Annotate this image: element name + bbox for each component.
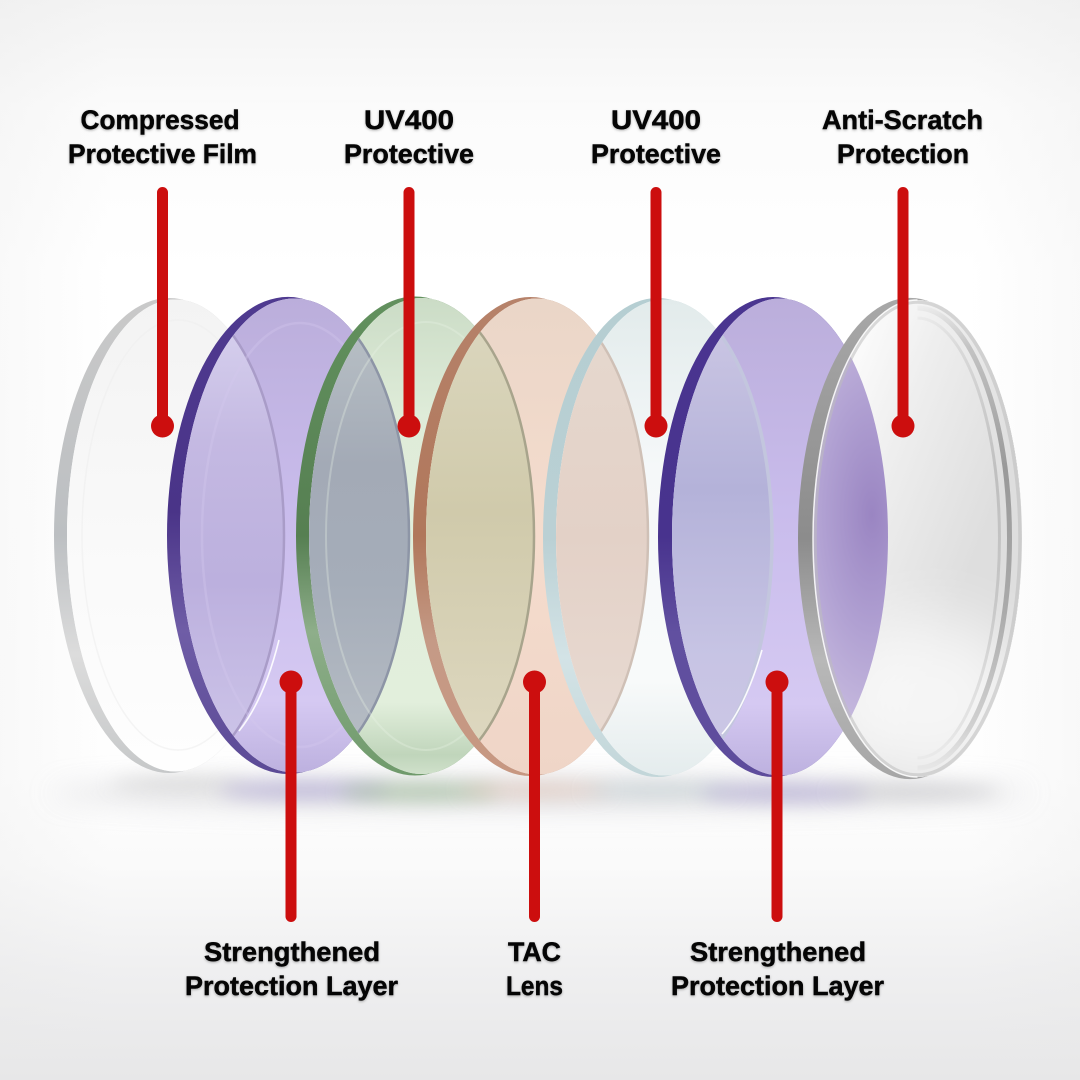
label: Anti-Scratch Protection: Protection (837, 139, 969, 169)
lens 1: clear compressed protective film (54, 298, 284, 773)
callout: UV400 Protective (right) (591, 105, 721, 438)
label: TAC Lens: TAC (508, 937, 561, 967)
lens 7: clear anti-scratch protection (798, 298, 1022, 780)
label: Strengthened Protection Layer: Protection Layer (671, 971, 884, 1001)
lens 4: peach TAC lens (413, 297, 596, 776)
leader line (892, 187, 914, 438)
label: TAC Lens (506, 937, 563, 1001)
label: Strengthened Protection Layer (185, 937, 398, 1001)
label: Compressed Protective Film (68, 105, 257, 169)
label: UV400 Protective: UV400 (364, 105, 454, 135)
leader line (151, 187, 174, 438)
lens 3: green UV400 protective layer (296, 296, 474, 776)
label: Compressed Protective Film: Protective Film (68, 139, 257, 169)
floor shadow (50, 777, 1030, 807)
label: Anti-Scratch Protection (822, 105, 983, 169)
callout: TAC Lens (506, 670, 563, 1001)
callout: Strengthened Protection Layer (right) (671, 670, 884, 1001)
label: UV400 Protective: Protective (344, 139, 474, 169)
label: Strengthened Protection Layer (671, 937, 884, 1001)
callout: Strengthened Protection Layer (left) (185, 670, 398, 1001)
label: UV400 Protective (344, 105, 474, 169)
leader line (398, 187, 420, 438)
lens 6: purple strengthened protection layer (658, 297, 844, 777)
label: UV400 Protective (591, 105, 721, 169)
lens 5: clear UV400 protective layer (543, 298, 716, 777)
callout: UV400 Protective (left) (344, 105, 474, 438)
lens 2: purple strengthened protection layer (167, 296, 358, 774)
label: UV400 Protective: Protective (591, 139, 721, 169)
callout: Compressed Protective Film (68, 105, 257, 438)
label: UV400 Protective: UV400 (611, 105, 701, 135)
label: Strengthened Protection Layer: Strengthened (204, 937, 380, 967)
label: Anti-Scratch Protection: Anti-Scratch (822, 105, 983, 135)
label: Compressed Protective Film: Compressed (80, 105, 240, 135)
leader line (766, 670, 788, 922)
leader line (280, 670, 302, 922)
leader line (523, 670, 546, 922)
callout: Anti-Scratch Protection (822, 105, 983, 438)
leader line (644, 187, 668, 438)
label: Strengthened Protection Layer: Protection Layer (185, 971, 398, 1001)
label: TAC Lens: Lens (506, 971, 563, 1001)
label: Strengthened Protection Layer: Strengthened (690, 937, 866, 967)
